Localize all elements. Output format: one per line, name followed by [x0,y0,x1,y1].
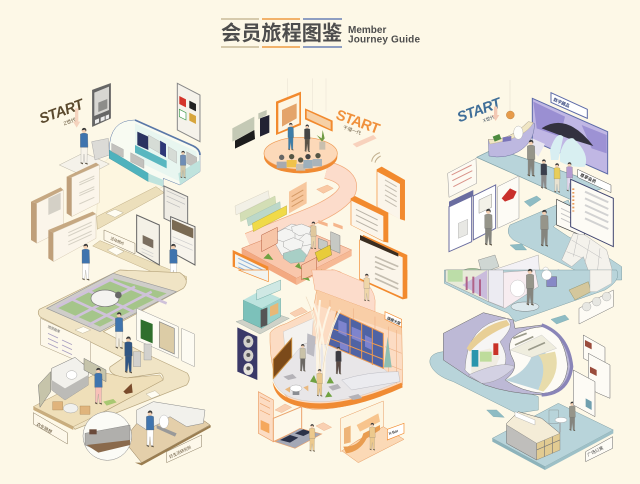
stage platform [264,137,337,173]
column: Z generation journey upper [31,83,200,283]
walkway S [248,170,348,242]
label board left: 衣生随想 [35,421,54,436]
gallery cards [235,191,287,232]
START label Z: Z世代 [63,116,77,127]
intro card B [31,187,63,243]
shop racks [446,270,488,302]
arrow: to plaza [487,410,504,417]
frame panels [262,227,317,280]
gallery platform [242,227,352,285]
sculpture outline [306,297,340,393]
START label Z: START [37,96,87,128]
subway car [109,120,200,187]
stage sign: X-Bar [388,429,399,436]
tall sign [289,182,307,213]
person: staff [527,140,535,177]
arrow: lower walkway [146,391,160,398]
plaza label [586,437,613,462]
person: visitor 2 [554,163,560,193]
person: map viewer [115,312,123,349]
yellow sign [315,245,332,262]
person: walkway [541,210,548,247]
arrow: gallery [332,269,346,277]
person: using phone [170,244,177,281]
teal booth [236,280,289,334]
top banner [551,93,587,118]
person: guest [304,124,310,152]
person: right room [146,411,154,447]
person: visitor 3 [567,162,573,192]
entry platform [59,153,109,177]
walkway 1 [97,187,164,229]
info sheet [579,290,613,324]
purple shell theater [443,313,572,395]
display panels [38,358,106,407]
small screen remnant [238,270,268,282]
map legend panel: 地图指南 [47,324,62,334]
intro card A [67,163,99,217]
sign [123,383,133,394]
right card 2 [351,196,388,243]
main title: 会员旅程图鉴 [221,22,342,45]
hall sign [385,312,402,327]
mat [511,302,539,311]
right room [123,402,211,465]
column: X generation journey lower [430,269,618,470]
shop area top [447,255,568,280]
person: shop [526,269,534,306]
person: card reader [364,274,370,301]
car floor [275,428,322,448]
arena [505,327,568,393]
person: cafe [569,402,575,431]
glass kiosk [52,357,88,400]
person: car viewer [309,424,315,452]
left painting [273,338,292,378]
arrow: map [75,327,91,333]
label board right: 好生活研究所 [168,444,192,459]
shop platform [444,270,618,322]
plant [317,130,328,150]
arrow: exit B [316,423,332,431]
arrow: walkway 1 [524,196,541,207]
small poster [305,108,333,132]
plants [263,253,328,281]
START label X: START [455,95,504,126]
poster stand [573,370,595,417]
hall sign: 旗舰大厦 [386,315,402,326]
stage sign [387,423,404,440]
plaza outline [97,157,163,218]
START label Y: 千禧一代 [342,124,362,137]
person: host [288,123,294,150]
walkway to theater [430,352,538,413]
arrow: start [353,135,377,147]
poster wall B [473,185,496,240]
hanging lines [288,78,326,112]
hanging line [509,80,511,112]
map plate [47,273,177,332]
right card 3 [359,235,407,280]
phone screen 2 [137,215,159,265]
QR poster [276,92,301,135]
plaza label: 广场公寓 [586,444,605,458]
arrow: walkway [317,185,333,193]
arrow: walkway 2 [107,247,124,255]
walkway fill [248,170,348,242]
arrow: start [492,107,499,121]
left poster [448,158,477,197]
screen wall [232,110,269,149]
QR board [92,83,111,127]
phone screen 3 [171,217,195,265]
main screen [532,98,608,174]
shell outer ring [542,325,572,395]
table set [285,385,308,395]
arrow: to theater [551,315,569,324]
arrow: exit A [275,404,292,413]
walkway platform [38,270,189,429]
poster wall A [449,190,473,252]
leaflet 1 [583,335,605,370]
map legend panel [41,318,91,367]
planter [569,282,591,300]
hall shell [270,290,403,409]
title block [221,19,420,47]
feather sculpture [306,297,340,393]
app phone board [177,83,200,142]
person: ticket gate [125,337,132,373]
column: Z generation journey lower [33,270,211,465]
kiosks [318,220,343,253]
top banner: 数字藏品 [552,96,571,110]
inset circle [83,412,132,460]
leaflet 2 [588,353,610,398]
subtitle: Journey Guide [348,34,420,46]
member banner [578,169,611,193]
member card large [571,179,613,247]
member card small [557,199,584,237]
shop shelf [258,392,273,442]
intro card C [48,212,96,262]
paving [283,374,362,400]
left room floor [33,357,163,430]
wifi waves [372,153,381,163]
reception desk [488,122,534,157]
phone screen 1 [164,186,188,229]
person: visitor 1 [541,159,547,189]
audience [277,153,322,171]
floor plate [477,148,608,199]
card 3 bottom [360,270,407,299]
medal [506,111,514,119]
START label X: X世代 [482,113,496,124]
right card 1 [377,167,405,221]
honeycomb pavilion [273,224,314,263]
furniture [53,402,90,414]
person: visitor B [336,347,341,374]
chair set [542,270,557,287]
member banner: 尊享会员 [579,171,598,185]
person: poster viewer [485,209,492,246]
label board left [33,413,67,444]
person: stage [369,423,375,450]
sign board [104,230,135,254]
walkway to hall [312,270,375,312]
arrow: walkway 1 [106,209,123,217]
label board right [167,435,202,463]
column: millennial journey upper [232,78,407,285]
person: visitor A [300,344,306,372]
arrow: into hall [290,307,307,317]
cafe bar [507,412,560,460]
person: center visitor [317,369,322,397]
walkway 2 [93,241,187,283]
brick arch [562,233,615,280]
walkway [508,200,622,280]
small card [182,328,194,367]
sign board: 活动预约 [110,236,125,246]
arrow: start down [73,108,80,128]
display box [273,407,302,442]
brick base [590,270,612,292]
cafe table [549,410,567,433]
gate posts [133,344,151,367]
subtitle: Member [348,25,386,36]
portrait panel [237,327,257,380]
arrow: walkway 2 [510,244,527,250]
plaza platform [492,403,613,470]
person: rider [180,151,186,178]
right stage [341,401,404,463]
column: millennial journey lower [236,270,407,463]
curved seating [342,372,400,390]
plants [310,375,334,397]
person: reading card [82,244,90,281]
green ticket board [137,308,178,358]
person: left room [95,368,102,405]
poster wall C [498,176,519,228]
person: start [80,128,88,165]
START label Y: START [334,107,382,138]
kiosk [92,138,109,160]
shop booth [488,270,538,308]
person: kiosk [311,222,316,249]
column: X generation journey upper [447,80,622,280]
lower-left screen [233,250,268,280]
